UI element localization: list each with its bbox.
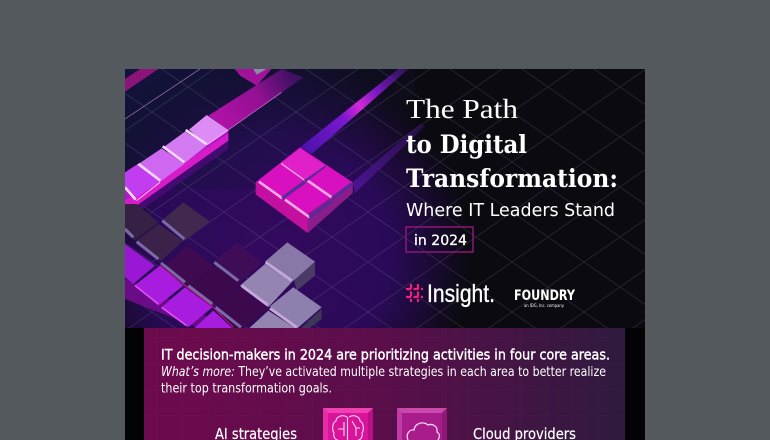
title: The Path <box>406 94 519 124</box>
summary panel <box>144 328 625 440</box>
grey lilac blocks <box>240 242 322 329</box>
logo: Insight: Insight. <box>427 280 495 308</box>
glowing beams <box>125 69 425 193</box>
logo: Insight <box>406 280 495 308</box>
title: to Digital <box>406 130 527 159</box>
summary text: What’s more: They’ve activated multiple strategies in each area to better realize <box>161 364 606 380</box>
hero panel <box>115 69 645 329</box>
dark violet blocks <box>125 202 268 329</box>
year badge: in 2024 <box>414 233 467 249</box>
centre magenta cluster <box>256 147 353 233</box>
logo: Foundry: an IDG, Inc. company <box>524 303 565 308</box>
bright lilac block row <box>125 115 228 209</box>
logo: Foundry <box>514 288 575 308</box>
icon: brain <box>323 408 373 440</box>
year badge <box>406 227 473 252</box>
icon: cloud <box>397 408 447 440</box>
title <box>406 94 618 221</box>
summary text: IT decision-makers in 2024 are prioritizing activities in four core areas. <box>161 348 610 364</box>
purple block row <box>125 244 235 329</box>
3D block artwork <box>115 69 425 329</box>
title: Where IT Leaders Stand <box>406 200 615 221</box>
logo: Foundry: FOUNDRY <box>514 288 575 304</box>
card background <box>125 69 645 440</box>
summary text <box>161 348 610 396</box>
summary text: their top transformation goals. <box>161 380 332 396</box>
title: Transformation: <box>406 164 618 193</box>
